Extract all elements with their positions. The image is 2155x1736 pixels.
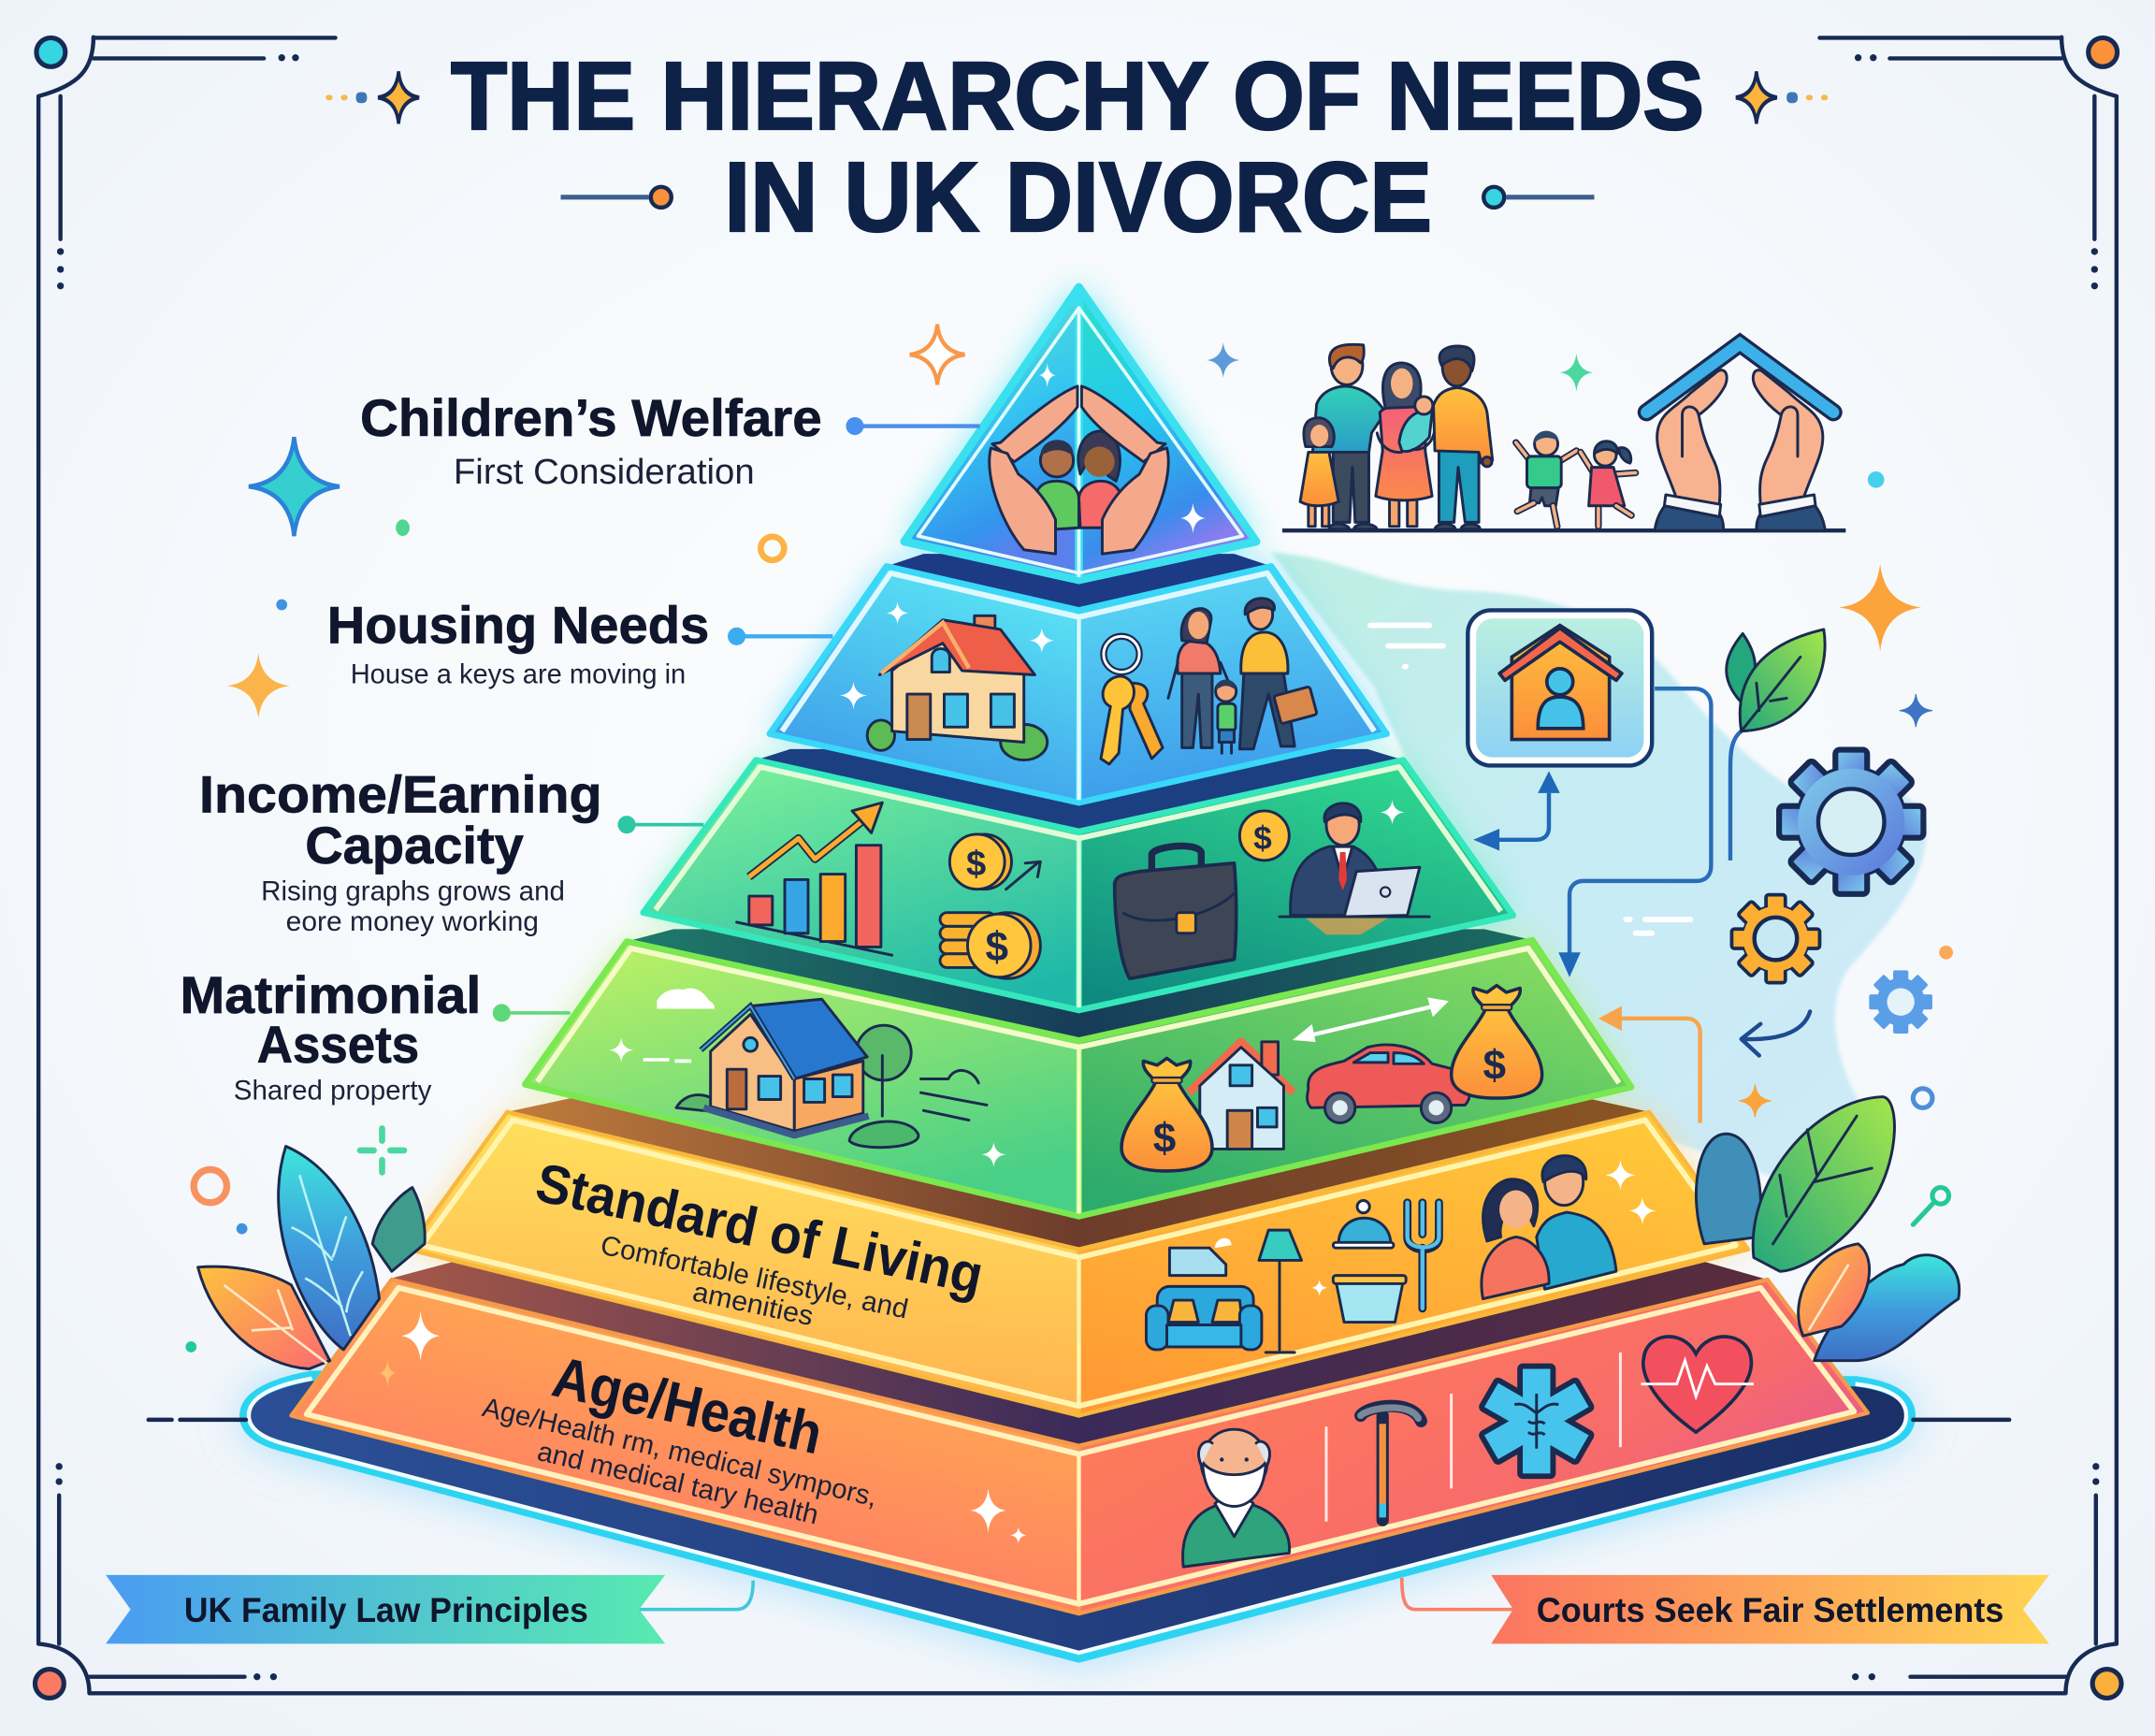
text: Age/Health: Age/Health rm, medical sympors, [480,1392,880,1512]
sparkles and wind lines [609,1037,1006,1167]
icon: small blue gear [1869,970,1932,1034]
icon: sprout leaf [1727,629,1825,861]
connector: card to income tier [1473,771,1560,851]
text: Standard of Living: Standard of Living [530,1152,989,1307]
label: Matrimonial Assets: Assets [257,1015,419,1074]
icon: rising bar chart [737,803,892,955]
tier 5: Standard of Living [408,1097,1748,1415]
tier 6: Age/Health [292,1262,1868,1613]
icon: cloche, basket and fork [1333,1201,1439,1323]
label: Children's Welfare: First Consideration [454,452,755,492]
title [451,42,1704,253]
icon: sofa and lamp [1146,1230,1302,1353]
label: Housing Needs [327,596,832,689]
father one [1312,344,1385,529]
tier 4: Matrimonial Assets [525,929,1631,1216]
title: IN UK DIVORCE [724,142,1432,253]
icon: protective hands [990,386,1168,554]
motion lines on blob [1370,626,1690,933]
label: Children's Welfare: Children’s Welfare [360,388,822,447]
icon: coin [1239,811,1289,861]
right bottom leaves [1696,1097,1960,1361]
ribbon: UK Family Law Principles [106,1575,753,1643]
icon: walking cane [1361,1406,1421,1520]
pyramid glow [245,287,1910,1657]
arrow: double-headed exchange [1296,999,1446,1040]
ribbon: Courts Seek Fair Settlements [1402,1575,2049,1643]
text: Age/Health: and medical tary health [534,1436,821,1530]
label: Matrimonial Assets: Shared property [234,1076,432,1107]
icon: family moving in [1168,599,1317,753]
label: Income/Earning Capacity: eore money working [286,906,539,937]
ribbon: UK Family Law Principles: UK Family Law Principles [184,1591,588,1629]
decorative blob behind right diagram [1271,553,1927,1182]
icon: old man [1183,1429,1290,1567]
icon: house [867,615,1048,760]
text: Standard of Living: amenities [690,1277,816,1332]
icon: red car [1308,1045,1470,1122]
decorative stars and dots [149,325,2009,1420]
icon: couple [1482,1156,1616,1299]
tier 2: Housing Needs [770,554,1387,803]
icon: money bag right [1452,986,1542,1098]
icon: star of life [1481,1367,1592,1476]
right hand [1753,370,1823,504]
sparkles [840,602,1054,709]
title: THE HIERARCHY OF NEEDS [451,42,1704,150]
icon: coins: $ [966,844,986,884]
icon: coin: $ [1253,820,1272,857]
text: Standard of Living: Comfortable lifestyle, and [598,1230,911,1325]
label: Income/Earning Capacity: Rising graphs grows and [261,875,565,906]
illustration: running children [1516,431,1636,527]
illustration: roof and hands [1646,343,1833,530]
ribbon: Courts Seek Fair Settlements: Courts Seek Fair Settlements [1537,1591,2003,1629]
label: Children's Welfare [360,388,980,492]
tier 1: Children's Welfare [904,287,1256,580]
label: Housing Needs: House a keys are moving in [351,658,686,689]
illustration: family [1282,344,1845,530]
icon: house with tree [657,988,918,1148]
illustration: house card [1468,610,1652,765]
title ornaments [328,71,1825,208]
text: Age/Health [480,1345,880,1530]
connector: orange arrow [1598,1006,1700,1122]
sparkle [1380,800,1405,825]
icon: large blue gear [1779,750,1923,894]
text: Age/Health: Age/Health [547,1345,828,1467]
label: Matrimonial Assets: Matrimonial [180,965,481,1024]
roof [1646,343,1833,412]
separator lines [1326,1353,1620,1522]
mother with baby [1376,363,1435,527]
tier 3: Income/Earning Capacity [644,749,1513,1010]
icon: heart with pulse [1641,1337,1754,1432]
label: Income/Earning Capacity: Income/Earning [199,764,602,823]
father two [1434,346,1493,529]
label: Matrimonial Assets [180,965,571,1107]
sparkles [380,1311,1027,1543]
icon: orange gear [1731,895,1819,983]
icon: keys [1101,636,1163,764]
left hand [1657,370,1727,504]
label: Income/Earning Capacity [199,764,703,937]
daughter [1300,418,1338,527]
icon: money bag and house: $ [1153,1115,1176,1161]
icon: money bag right: $ [1482,1042,1506,1088]
sparkles [1311,1160,1656,1296]
icon: children [1034,431,1122,530]
icon: man at laptop [1280,803,1429,934]
label: Housing Needs: Housing Needs [327,596,709,655]
icon: coins [940,834,1040,978]
base plate [245,1376,1910,1657]
connector: card to assets tier [1558,688,1711,977]
arrow: curved blue [1742,1011,1810,1055]
icon: coins: $ [986,924,1008,970]
sparkles [1039,363,1206,533]
icon: money bag and house [1121,1042,1294,1171]
icon: briefcase [1115,846,1237,978]
left bottom leaves [198,1146,425,1369]
label: Income/Earning Capacity: Capacity [305,816,524,875]
